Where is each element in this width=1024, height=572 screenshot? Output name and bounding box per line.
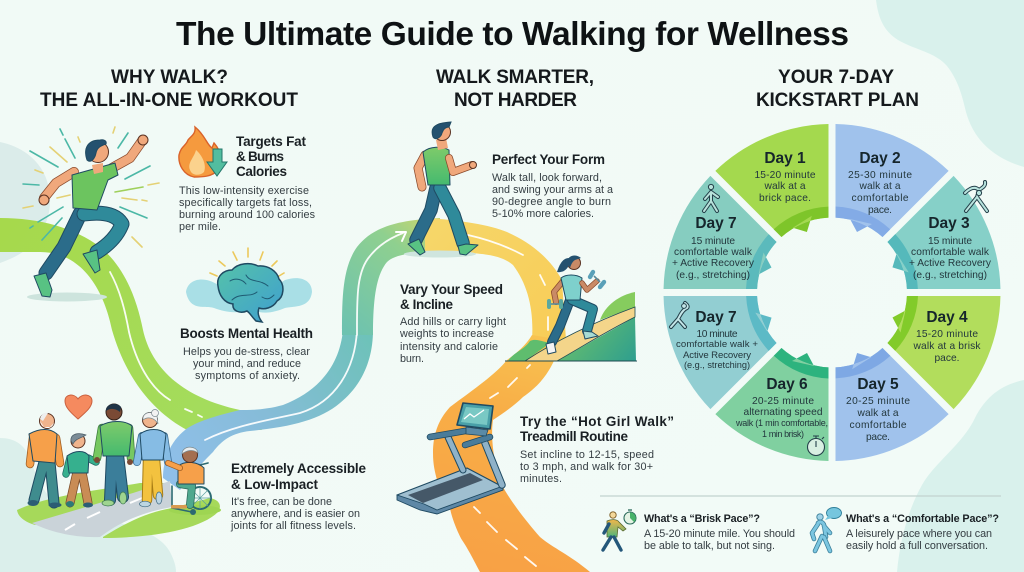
segment: day 1: brick pace. xyxy=(759,193,811,204)
segment: day 1: walk at a xyxy=(764,181,806,192)
segment: day 6 xyxy=(715,348,828,461)
energy rays xyxy=(23,127,159,247)
segment: day 6: 1 min brisk) xyxy=(762,429,804,439)
icon: walking figure xyxy=(704,184,718,211)
segment: day 6: alternating speed xyxy=(744,407,823,418)
text: perfect your form: 90-degree angle to burn xyxy=(492,196,611,208)
icon: stretching figure xyxy=(965,182,987,211)
segment: day 6: 20-25 minute xyxy=(752,396,814,407)
text: hot girl walk: minutes. xyxy=(520,473,562,485)
heading: walk smarter: WALK SMARTER, xyxy=(436,67,594,88)
heading: walk smarter: NOT HARDER xyxy=(454,90,577,111)
segment: day 5: 20-25 minute xyxy=(846,396,910,407)
text: perfect your form: Walk tall, look forward, xyxy=(492,172,602,184)
text: targets fat: This low-intensity exercise xyxy=(179,185,309,197)
text: brisk pace xyxy=(644,513,795,552)
text: targets fat: & Burns xyxy=(236,149,284,164)
segment: day 4: pace. xyxy=(934,353,960,364)
older woman xyxy=(137,410,168,507)
segment: day 4 xyxy=(887,296,1000,409)
hill xyxy=(505,292,637,361)
icon: walking man xyxy=(404,122,478,258)
segment: day 3: Day 3 xyxy=(928,215,970,232)
segment: day 7 upper xyxy=(664,176,777,289)
illustration: woman walking uphill with dumbbells xyxy=(505,256,637,361)
segment: day 3 xyxy=(874,176,1024,336)
segment: day 6: Day 6 xyxy=(766,376,808,393)
person in wheelchair xyxy=(168,447,221,515)
segment: day 7 upper: comfortable walk xyxy=(674,247,753,258)
text: boosts mental health: symptoms of anxiety. xyxy=(195,370,300,382)
segment: day 5: comfortable xyxy=(850,420,907,431)
text: brisk pace: A 15-20 minute mile. You should xyxy=(644,528,795,540)
icon: running man xyxy=(23,127,159,302)
segment: day 2: 25-30 minute xyxy=(848,170,912,181)
icon: brisk walker with stopwatch xyxy=(603,510,636,550)
text: hot girl walk: to 3 mph, and walk for 30+ xyxy=(520,461,653,473)
text: vary your speed: Vary Your Speed xyxy=(400,282,503,297)
orange path xyxy=(433,335,590,572)
text: boosts mental health: your mind, and reduce xyxy=(193,358,301,370)
segment: day 7 upper: Day 7 xyxy=(695,215,737,232)
segment: day 1: 15-20 minute xyxy=(754,170,816,181)
heading: kickstart plan: YOUR 7-DAY xyxy=(778,67,894,88)
green to yellow path arc xyxy=(342,218,440,335)
segment: day 1: Day 1 xyxy=(764,150,806,167)
segment: day 4: Day 4 xyxy=(926,309,968,326)
heading: kickstart plan xyxy=(756,67,919,111)
text: comfortable pace: easily hold a full conversation. xyxy=(846,540,988,552)
text: perfect your form xyxy=(492,152,613,220)
segment: day 3: + Active Recovery xyxy=(909,258,992,269)
text: extremely accessible xyxy=(230,461,366,532)
text: vary your speed xyxy=(399,282,506,365)
segment: day 4: walk at a brisk xyxy=(912,341,981,352)
segment: day 7 upper: 15 minute xyxy=(691,236,735,247)
text: extremely accessible: & Low-Impact xyxy=(231,477,318,492)
text: extremely accessible: Extremely Accessible xyxy=(231,461,366,476)
segment: day 1 xyxy=(715,91,875,251)
segment: day 2: walk at a xyxy=(858,181,901,192)
segment: day 5: pace. xyxy=(866,432,890,443)
segment: day 7 upper: + Active Recovery xyxy=(672,258,755,269)
segment: day 6: walk (1 min comfortable, xyxy=(735,418,828,428)
icon: brain with waves xyxy=(186,248,312,322)
icon: flame with down arrow xyxy=(179,127,227,177)
heading: walk smarter xyxy=(436,67,594,111)
text: extremely accessible: It's free, can be done xyxy=(231,496,332,508)
segment: day 5 xyxy=(789,334,949,494)
text: comfortable pace: What's a “Comfortable Pace”? xyxy=(846,513,999,525)
segment: day 3: comfortable walk xyxy=(911,247,990,258)
text: perfect your form: Perfect Your Form xyxy=(492,152,605,167)
child xyxy=(66,434,96,508)
text: comfortable pace xyxy=(846,513,999,552)
text: extremely accessible: joints for all fitness levels. xyxy=(230,520,356,532)
segment: day 7 upper: (e.g., stretching) xyxy=(676,270,750,281)
segment: day 5: walk at a xyxy=(856,408,899,419)
text: vary your speed: weights to increase xyxy=(399,328,494,340)
heading: why walk: THE ALL-IN-ONE WORKOUT xyxy=(40,90,298,111)
icon: comfortable walker with speech bubble xyxy=(812,508,842,551)
title: The Ultimate Guide to Walking for Wellness xyxy=(176,16,849,53)
text: hot girl walk: Treadmill Routine xyxy=(520,429,628,444)
text: vary your speed: Add hills or carry light xyxy=(400,316,506,328)
segment: day 2: Day 2 xyxy=(859,150,901,167)
text: targets fat: per mile. xyxy=(179,221,221,233)
text: boosts mental health xyxy=(180,326,313,382)
text: perfect your form: 5-10% more calories. xyxy=(492,208,594,220)
illustration: group walking on a path xyxy=(17,395,221,538)
text: targets fat: Targets Fat xyxy=(236,134,306,149)
heading: kickstart plan: KICKSTART PLAN xyxy=(756,90,919,111)
segment: day 3: 15 minute xyxy=(928,236,972,247)
divider xyxy=(600,495,1001,497)
icon: stopwatch xyxy=(808,436,824,456)
text: boosts mental health: Boosts Mental Health xyxy=(180,326,313,341)
icon: stretching figure xyxy=(671,303,688,327)
segment: day 7 lower: Day 7 xyxy=(695,309,737,326)
text: hot girl walk: Try the “Hot Girl Walk” xyxy=(520,414,674,429)
text: targets fat xyxy=(179,134,316,233)
wheel: 7-day plan xyxy=(630,91,1024,494)
older man xyxy=(28,413,62,508)
text: brisk pace: What's a “Brisk Pace”? xyxy=(644,513,760,525)
text: brisk pace: be able to talk, but not sing. xyxy=(644,540,775,552)
text: vary your speed: & Incline xyxy=(400,297,453,312)
text: vary your speed: burn. xyxy=(400,353,424,365)
green path xyxy=(0,218,262,430)
text: hot girl walk: Set incline to 12-15, speed xyxy=(520,449,654,461)
text: vary your speed: intensity and calorie xyxy=(400,341,498,353)
text: perfect your form: and swing your arms at a xyxy=(492,184,613,196)
man in green shirt xyxy=(94,404,133,506)
illustration: treadmill xyxy=(397,403,503,514)
text: boosts mental health: Helps you de-stress, clear xyxy=(183,346,310,358)
segment: day 7 lower: comfortable walk + xyxy=(676,339,758,350)
yellow path xyxy=(425,218,566,340)
segment: day 5: Day 5 xyxy=(857,376,899,393)
text: targets fat: Calories xyxy=(236,164,287,179)
text: extremely accessible: anywhere, and is easier on xyxy=(231,508,360,520)
text: targets fat: specifically targets fat loss, xyxy=(179,197,312,209)
icon: heart xyxy=(65,395,92,419)
segment: day 7 lower: (e.g., stretching) xyxy=(684,360,750,370)
heading: why walk: WHY WALK? xyxy=(111,67,228,88)
segment: day 4: 15-20 minute xyxy=(916,329,978,340)
segment: day 2 xyxy=(836,124,949,237)
segment: day 3: (e.g., stretching) xyxy=(913,270,987,281)
segment: day 7 lower: Active Recovery xyxy=(683,350,751,361)
heading: why walk xyxy=(40,67,298,111)
segment: day 2: comfortable xyxy=(852,193,909,204)
text: comfortable pace: A leisurely pace where you can xyxy=(846,528,992,540)
segment: day 2: pace. xyxy=(868,205,892,216)
ground xyxy=(17,481,220,538)
text: hot girl walk xyxy=(520,414,674,485)
text: targets fat: burning around 100 calories xyxy=(179,209,316,221)
blue and teal path xyxy=(163,330,373,490)
segment: day 7 lower: 10 minute xyxy=(696,329,738,340)
segment: day 7 lower xyxy=(630,249,790,409)
